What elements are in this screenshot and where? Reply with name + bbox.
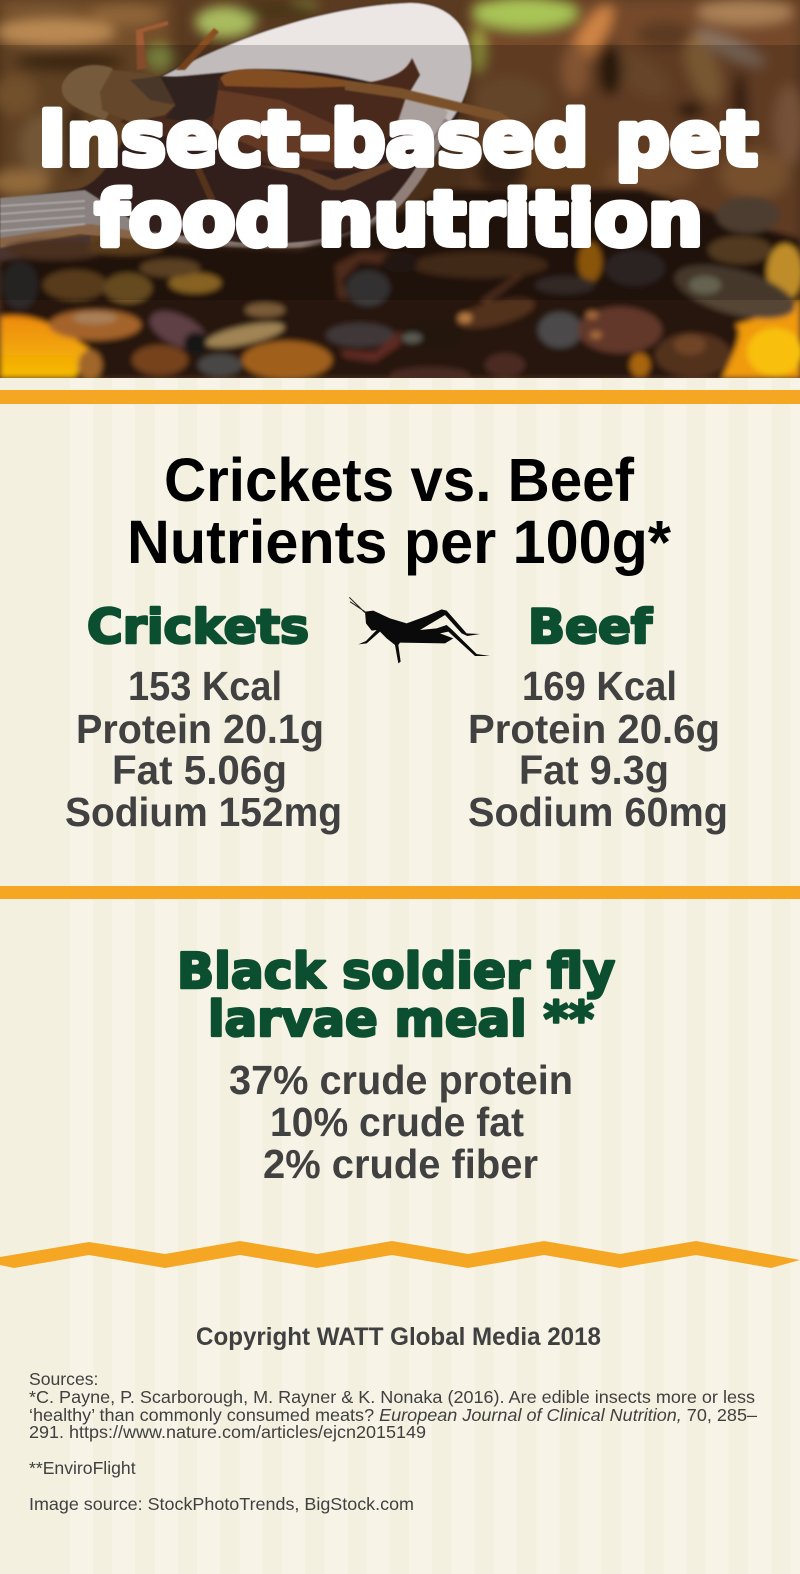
beef heading: Beef [528,600,653,655]
larvae heading [177,943,615,1048]
title: food nutrition [95,174,703,263]
panel: beef column [468,600,728,835]
sources text block: ‘healthy’ than commonly consumed meats? European Journal of Clinical Nutrition, 70, 285– [29,1405,757,1425]
crickets nutrients: Fat 5.06g [112,747,287,793]
grasshopper on spoon [62,20,510,200]
sources text block: **EnviroFlight [29,1458,136,1478]
larvae nutrients: 37% crude protein [229,1057,573,1103]
beef nutrients: Fat 9.3g [519,747,669,793]
larvae heading: Black soldier fly [177,943,615,1000]
crickets nutrients [65,663,342,835]
sources text block: 291. https://www.nature.com/articles/ejcn2015149 [29,1422,426,1442]
fork tines [0,190,140,262]
spoon [0,2,472,249]
sources text block: Sources: [29,1369,98,1389]
title: Insect-based pet [38,94,758,183]
title [38,94,758,263]
sources text block [29,1369,757,1514]
orange divider top [0,390,800,404]
crickets heading: Crickets [87,600,309,655]
beef nutrients [468,663,728,835]
beef nutrients: 169 Kcal [522,663,677,709]
icon: cricket silhouette [349,597,490,663]
heading: crickets vs beef: Nutrients per 100g* [127,508,671,576]
translucent band over photo [0,45,800,300]
heading: crickets vs beef: Crickets vs. Beef [164,446,635,514]
orange divider middle [0,886,800,899]
larvae heading: larvae meal ** [208,991,594,1048]
crickets nutrients: Protein 20.1g [76,706,324,752]
hero photo: insects on a spoon [0,0,800,383]
larvae nutrients: 2% crude fiber [263,1141,538,1187]
copyright line: Copyright WATT Global Media 2018 [196,1323,601,1351]
beef nutrients: Sodium 60mg [468,789,728,835]
lower insects [0,190,800,383]
sources text block: *C. Payne, P. Scarborough, M. Rayner & K. Nonaka (2016). Are edible insects more or less [29,1387,755,1407]
panel: black soldier fly larvae [177,943,615,1187]
crickets nutrients: 153 Kcal [128,663,282,709]
heading: crickets vs beef [127,446,671,576]
panel: crickets column [65,600,342,835]
beef nutrients: Protein 20.6g [468,706,720,752]
larvae nutrients: 10% crude fat [270,1099,524,1145]
sources text block: Image source: StockPhotoTrends, BigStock.com [29,1494,414,1514]
crickets nutrients: Sodium 152mg [65,789,342,835]
larvae nutrients [229,1057,573,1187]
zigzag divider [0,1241,800,1268]
